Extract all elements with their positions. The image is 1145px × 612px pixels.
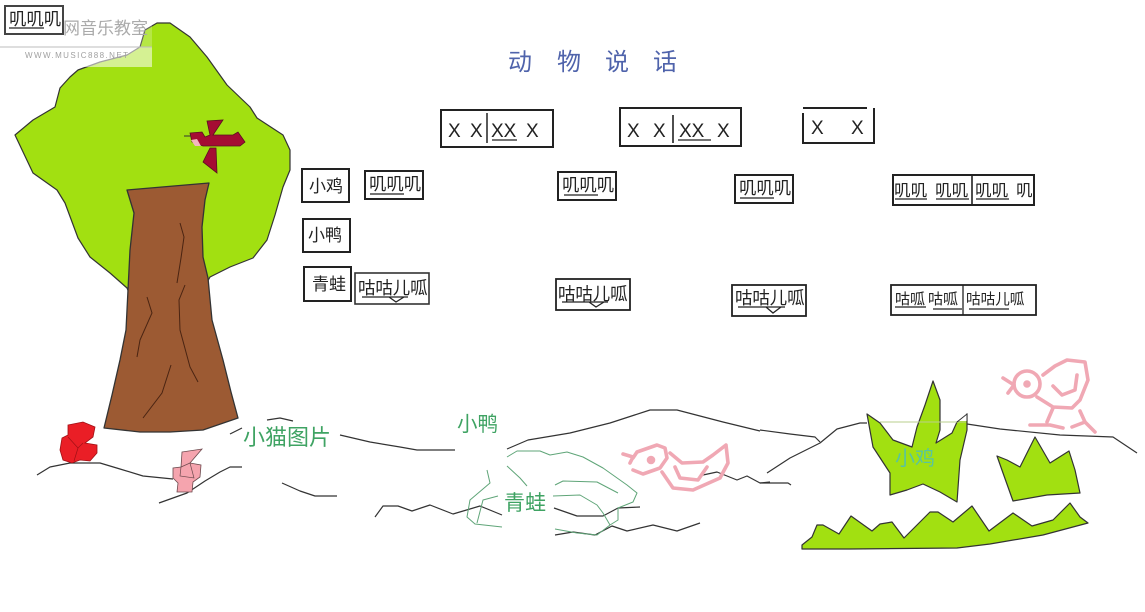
rhythm box 2 <box>620 108 741 146</box>
frog outline <box>467 451 637 535</box>
watermark overlay: WWW.MUSIC888.NET <box>25 51 128 60</box>
label: frog <box>304 267 351 301</box>
frog pattern 1 <box>355 273 429 304</box>
chick pattern 3: 叽叽叽 <box>739 178 791 198</box>
rhythm box 1: X <box>470 121 483 142</box>
chick pattern 3 <box>735 175 793 203</box>
chick pattern 1 <box>365 171 423 199</box>
red flower <box>60 422 97 463</box>
label: chick scene: 小鸡 <box>895 447 935 470</box>
rhythm box 1: XX <box>491 121 517 142</box>
frog pattern 3 <box>732 285 806 316</box>
center plant <box>867 381 967 502</box>
rhythm box 2: XX <box>679 121 705 142</box>
rhythm box 2: X <box>627 121 640 142</box>
right plant <box>997 437 1080 501</box>
label: frog: 青蛙 <box>312 275 346 294</box>
pink flower <box>173 449 202 492</box>
green plants <box>802 381 1088 549</box>
label: chick: 小鸡 <box>309 177 343 196</box>
title: 说 <box>605 49 629 76</box>
rhythm box 3: X <box>811 118 824 139</box>
frog pattern 4: 咕咕儿呱 <box>966 291 1025 308</box>
frog pattern 4: 咕呱 <box>928 291 958 308</box>
label: duckling <box>303 219 350 252</box>
watermark overlay <box>0 0 152 67</box>
label: duckling: 小鸭 <box>308 226 342 245</box>
frog pattern 2: 咕咕儿呱 <box>558 284 628 304</box>
watermark overlay: 网音乐教室 <box>63 19 148 38</box>
chick pattern 4 <box>893 175 1034 205</box>
top-left chirp box <box>5 6 63 34</box>
chick pattern 4: 叽叽 <box>975 181 1009 200</box>
bottom grass <box>802 503 1088 549</box>
frog pattern 1: 咕咕儿呱 <box>358 278 428 298</box>
top-left chirp box: 叽叽叽 <box>9 9 61 29</box>
chick pattern 4: 叽叽 <box>894 181 928 200</box>
rhythm box 1 <box>441 110 553 147</box>
rhythm box 2: X <box>717 121 730 142</box>
chick pattern 2: 叽叽叽 <box>562 175 614 195</box>
tree <box>15 23 290 432</box>
rhythm box 1: X <box>448 121 461 142</box>
title: 话 <box>653 49 677 76</box>
hills and ground lines <box>37 410 1137 535</box>
label: frog scene: 青蛙 <box>504 492 546 515</box>
pink chick drawing <box>1003 360 1095 432</box>
frog pattern 2 <box>556 279 630 310</box>
tree trunk <box>104 183 238 432</box>
frog pattern 4: 咕呱 <box>895 291 925 308</box>
pink duck drawing <box>623 445 728 490</box>
trunk bark lines <box>137 223 198 418</box>
frog pattern 4 <box>891 285 1036 315</box>
chick pattern 4: 叽叽 <box>935 181 969 200</box>
rhythm box 2: X <box>653 121 666 142</box>
rhythm box 3 <box>803 108 874 143</box>
chick pattern 2 <box>558 172 616 200</box>
title <box>508 49 677 76</box>
faint horizontal edge and white corner <box>880 414 967 424</box>
rhythm box 1: X <box>526 121 539 142</box>
title: 动 <box>508 49 532 76</box>
rhythm box 3: X <box>851 118 864 139</box>
title: 物 <box>557 49 581 76</box>
chick pattern 1: 叽叽叽 <box>369 174 421 194</box>
frog pattern 3: 咕咕儿呱 <box>735 288 805 308</box>
chick pattern 4: 叽 <box>1016 181 1033 200</box>
tree crown <box>15 23 290 295</box>
label: duckling scene: 小鸭 <box>457 413 498 436</box>
label: chick <box>302 169 349 202</box>
label: kitten picture: 小猫图片 <box>243 425 331 450</box>
bird on the tree <box>184 120 245 173</box>
